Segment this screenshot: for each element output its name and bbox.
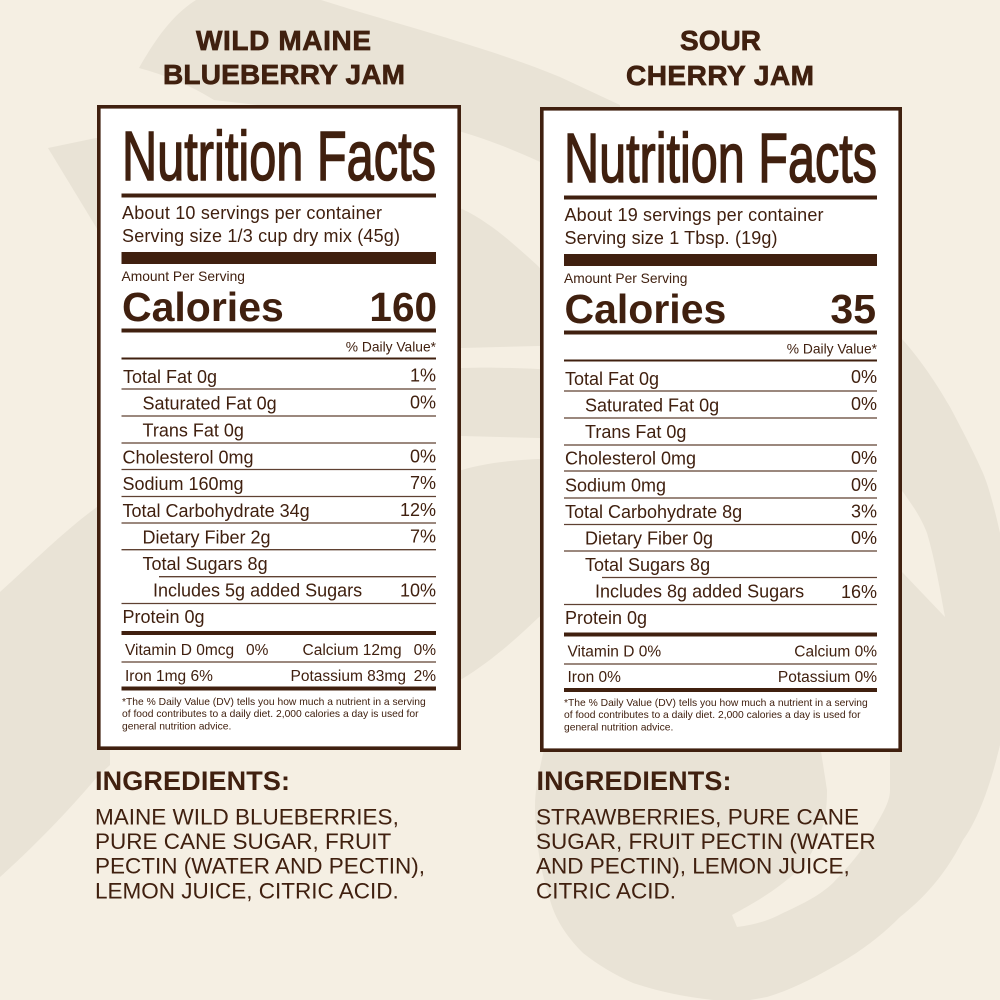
nutrient rows: Cholesterol 0mg [122,448,254,468]
nutrient rows: 10% [400,580,436,600]
vitamins and minerals: Vitamin D 0mcg [125,642,234,659]
ingredients: cherry jam: CITRIC ACID. [536,878,676,904]
ingredients: blueberry jam: INGREDIENTS: [95,766,290,796]
nutrient rows: Total Sugars 8g [585,555,710,575]
vitamins and minerals: Calcium 12mg [302,642,402,659]
nutrient rows: Saturated Fat 0g [585,396,719,416]
vitamins and minerals: Iron 0% [568,669,621,686]
panel: blueberry nutrition label [99,107,459,748]
serving information [564,205,824,248]
daily value header: % Daily Value* [787,342,878,356]
nutrient rows [564,367,877,628]
vitamins and minerals [564,644,877,686]
footnote: *The % Daily Value (DV) tells you how much a nutrient in a serving [564,698,868,709]
calories: Calories [564,286,726,332]
daily value header: % Daily Value* [346,340,437,354]
nutrient rows: Sodium 0mg [565,476,666,496]
heading: wild maine blueberry jam [163,25,405,90]
heading: sour cherry jam: CHERRY JAM [626,60,814,91]
nutrient rows: 0% [851,367,877,387]
ingredients: blueberry jam: LEMON JUICE, CITRIC ACID. [95,878,399,904]
nutrient rows: 12% [400,500,436,520]
nutrient rows: Protein 0g [565,608,647,628]
vitamins and minerals: Potassium 0% [778,669,877,686]
nutrient rows: Total Sugars 8g [142,554,268,574]
nutrient rows: Cholesterol 0mg [565,448,696,468]
serving information: About 19 servings per container [564,205,824,225]
vitamins and minerals: 0% [414,642,436,659]
nutrient rows: Includes 5g added Sugars [153,580,362,600]
calories: Calories [122,284,284,330]
heading: wild maine blueberry jam: WILD MAINE [196,25,371,56]
nutrient rows: 7% [410,473,436,493]
footnote [122,697,426,732]
ingredients: blueberry jam: PECTIN (WATER AND PECTIN), [95,854,425,878]
footnote: general nutrition advice. [122,722,231,732]
heading: sour cherry jam: SOUR [680,25,761,56]
ingredients: blueberry jam: PURE CANE SUGAR, FRUIT [95,829,392,854]
nutrient rows: Protein 0g [122,607,205,627]
heading: sour cherry jam [626,25,814,91]
nutrient rows: 0% [851,394,877,414]
nutrient rows: 0% [851,448,877,468]
vitamins and minerals: Calcium 0% [794,644,877,660]
label title: Nutrition Facts [122,117,436,195]
footnote: of food contributes to a daily diet. 2,000 calories a day is used for [122,709,419,720]
nutrient rows: 0% [410,392,436,412]
calories: 35 [830,286,876,332]
calories [564,271,876,332]
vitamins and minerals: Iron 1mg 6% [125,668,213,685]
serving information: About 10 servings per container [122,203,382,223]
nutrient rows: Sodium 160mg [122,474,244,494]
nutrient rows: 0% [851,475,877,495]
serving information [122,203,400,246]
nutrient rows: 7% [410,526,436,546]
heading: wild maine blueberry jam: BLUEBERRY JAM [163,59,405,90]
nutrient rows: Saturated Fat 0g [142,394,277,414]
nutrient rows: Total Carbohydrate 34g [122,501,310,521]
nutrient rows: Total Fat 0g [123,367,217,387]
ingredients: blueberry jam: MAINE WILD BLUEBERRIES, [95,804,399,830]
nutrient rows: 0% [410,446,436,466]
nutrient rows [122,366,436,627]
calories: 160 [369,284,437,330]
footnote [564,698,868,734]
vitamins and minerals: Potassium 83mg [290,668,406,685]
calories: Amount Per Serving [564,271,687,286]
footnote: general nutrition advice. [564,722,673,734]
nutrient rows: Total Carbohydrate 8g [565,502,742,522]
ingredients: cherry jam: AND PECTIN), LEMON JUICE, [536,854,850,878]
nutrient rows: Trans Fat 0g [142,420,244,440]
ingredients: cherry jam [536,766,876,904]
ingredients: cherry jam: INGREDIENTS: [536,766,732,796]
serving information: Serving size 1/3 cup dry mix (45g) [122,226,400,246]
serving information: Serving size 1 Tbsp. (19g) [564,228,778,248]
ingredients: blueberry jam [95,766,425,904]
vitamins and minerals: 0% [246,642,269,659]
ingredients: cherry jam: STRAWBERRIES, PURE CANE [536,804,859,830]
calories [122,269,437,330]
nutrient rows: 16% [841,582,877,602]
nutrient rows: Trans Fat 0g [585,422,686,442]
panel: cherry nutrition label [542,109,900,750]
ingredients: cherry jam: SUGAR, FRUIT PECTIN (WATER [536,829,876,854]
nutrient rows: Total Fat 0g [565,369,659,389]
footnote: of food contributes to a daily diet. 2,000 calories a day is used for [564,710,861,721]
nutrient rows: 0% [851,528,877,548]
nutrient rows: 1% [410,366,436,386]
nutrient rows: Includes 8g added Sugars [595,582,804,602]
nutrient rows: 3% [851,502,877,522]
footnote: *The % Daily Value (DV) tells you how much a nutrient in a serving [122,697,426,708]
vitamins and minerals [122,642,436,685]
vitamins and minerals: Vitamin D 0% [568,644,661,660]
calories: Amount Per Serving [122,269,245,284]
nutrient rows: Dietary Fiber 0g [585,528,713,548]
vitamins and minerals: 2% [414,668,436,685]
nutrient rows: Dietary Fiber 2g [142,528,271,548]
